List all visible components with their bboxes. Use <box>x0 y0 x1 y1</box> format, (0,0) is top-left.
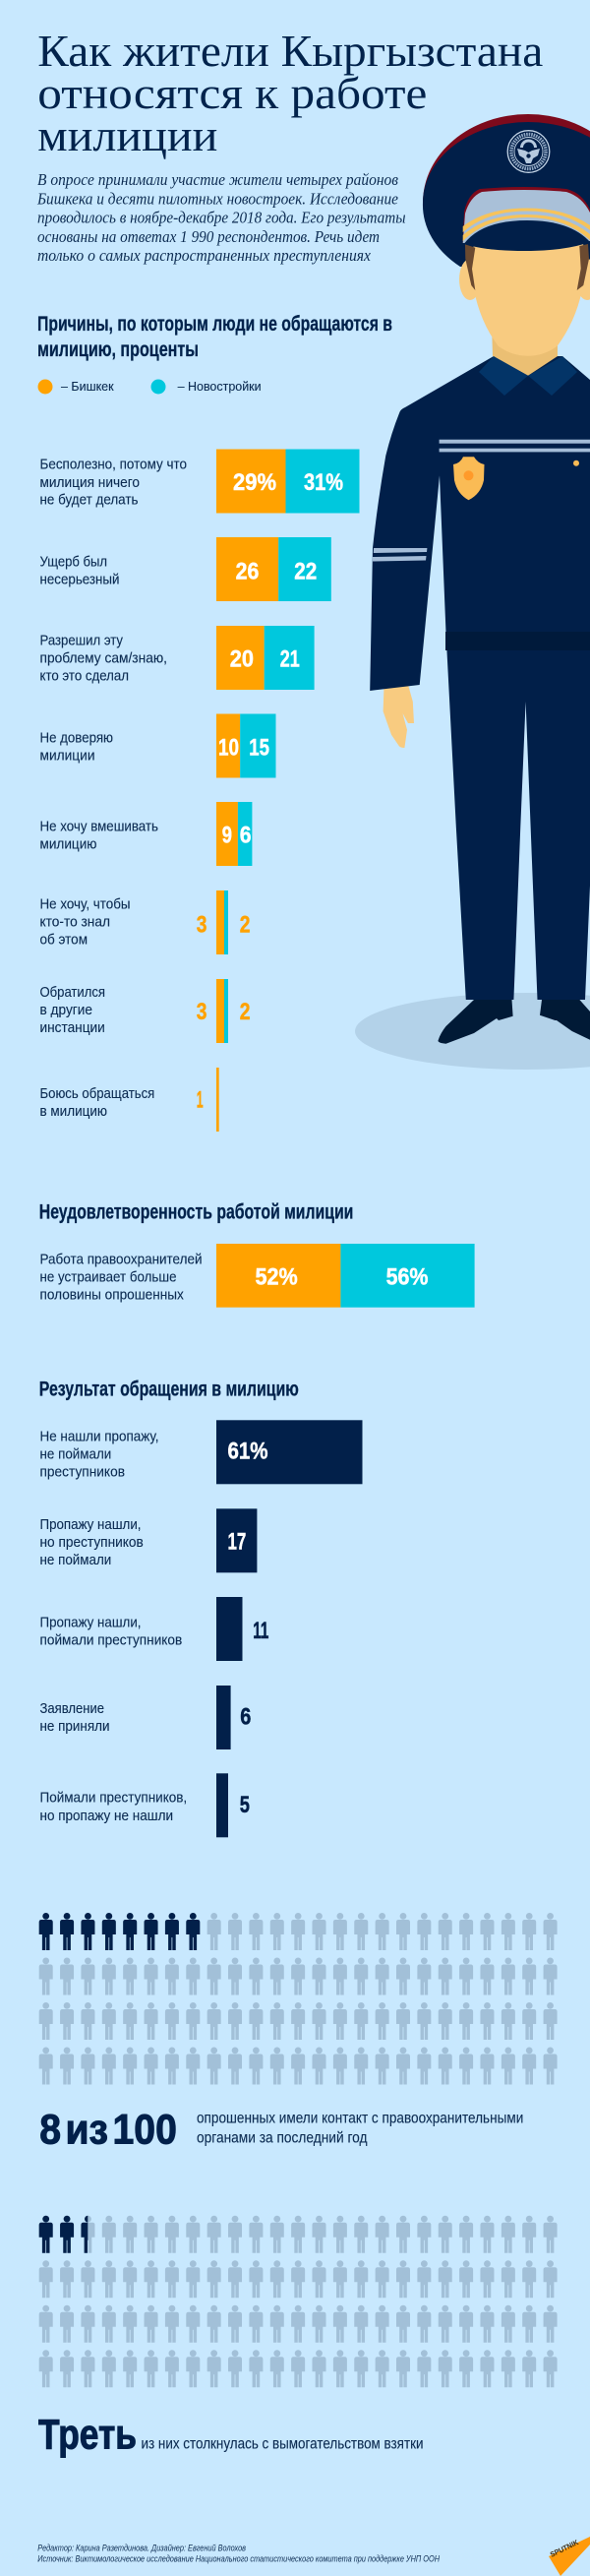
stat: 8 of 100: опрошенных имели контакт с правоохранительными <box>197 2110 523 2126</box>
heading: reasons <box>37 313 392 361</box>
stat: one third <box>38 2411 423 2458</box>
title <box>37 26 543 160</box>
intro text: основаны на ответах 1 990 респондентов. Речь идет <box>37 227 380 246</box>
row: nothing found: Не нашли пропажу, <box>39 1429 159 1444</box>
logo: sputnik: SPUTNIK <box>549 2538 580 2559</box>
row: solved myself: 20 <box>230 646 254 673</box>
bar: dissatisfaction: 52% <box>256 1263 298 1290</box>
ears <box>459 259 590 300</box>
row: afraid <box>39 1068 219 1132</box>
row: not serious: 26 <box>236 558 259 584</box>
row: both: 11 <box>253 1618 268 1644</box>
bar: dissatisfaction <box>39 1244 475 1308</box>
row: other agencies: 2 <box>240 999 250 1025</box>
row: rejected <box>39 1686 251 1749</box>
hair <box>465 244 589 290</box>
row: solved myself: проблему сам/знаю, <box>39 650 167 666</box>
row: other agencies: 3 <box>197 999 206 1025</box>
row: both: Пропажу нашли, <box>39 1615 142 1630</box>
row: other agencies: инстанции <box>39 1020 105 1036</box>
row: item found: Пропажу нашли, <box>39 1517 142 1533</box>
row: nobody should know: 2 <box>240 911 250 938</box>
row: no trust: 15 <box>249 734 269 761</box>
stat: 8 of 100: 8 из 100 <box>39 2106 177 2153</box>
cap visor <box>464 220 590 251</box>
row: useless: 31% <box>304 469 343 496</box>
button <box>573 460 579 466</box>
row: nobody should know <box>39 890 250 954</box>
hand <box>384 685 414 748</box>
bar: dissatisfaction: не устраивает больше <box>39 1270 177 1286</box>
title: милиции <box>37 110 217 160</box>
row: both: поймали преступников <box>39 1632 182 1648</box>
row: item found: не поймали <box>39 1553 111 1568</box>
uniform <box>370 356 590 1000</box>
row: criminals caught: 5 <box>240 1792 250 1818</box>
row: solved myself: Разрешил эту <box>39 633 124 648</box>
logo: sputnik <box>549 2537 590 2576</box>
row: no trust: 10 <box>218 734 239 761</box>
bar: dissatisfaction: половины опрошенных <box>39 1288 184 1304</box>
intro text: Бишкека и десяти пилотных новостроек. Исследование <box>36 189 398 209</box>
hat crown <box>423 114 590 267</box>
belt <box>445 632 590 650</box>
neck <box>492 325 558 376</box>
row: rejected: не приняли <box>39 1719 110 1735</box>
row: useless: не будет делать <box>39 493 138 509</box>
row: nobody should know: об этом <box>39 932 88 948</box>
row: not involve: Не хочу вмешивать <box>39 820 158 835</box>
row: afraid: 1 <box>197 1086 204 1113</box>
collar <box>479 356 577 396</box>
sleeve stripes <box>373 548 427 561</box>
intro text <box>36 170 406 265</box>
row: rejected: Заявление <box>39 1701 104 1717</box>
pictogram: one third <box>39 2216 558 2387</box>
row: afraid: в милицию <box>39 1104 107 1120</box>
chest stripes <box>440 440 590 452</box>
bar chart: reasons <box>39 449 360 1132</box>
row: nothing found: не поймали <box>39 1446 111 1462</box>
row: criminals caught: Поймали преступников, <box>39 1791 187 1807</box>
row: nothing found <box>39 1420 362 1484</box>
legend: – Новостройки <box>178 379 262 394</box>
stat: one third: Треть <box>38 2411 137 2458</box>
heading: reasons: милицию, проценты <box>37 338 199 361</box>
row: not serious: 22 <box>294 558 317 584</box>
row: not involve <box>39 802 252 866</box>
row: not involve: милицию <box>39 837 97 853</box>
row: no trust: милиции <box>39 749 94 765</box>
legend <box>37 379 262 394</box>
row: criminals caught: но пропажу не нашли <box>39 1809 173 1824</box>
row: useless: милиция ничего <box>39 475 140 491</box>
pictogram: 8 of 100 <box>39 1913 558 2084</box>
row: item found <box>39 1508 257 1572</box>
credits: Редактор: Карина Разетдинова. Дизайнер: Евгений Волохов <box>37 2543 246 2553</box>
row: nothing found: 61% <box>228 1439 267 1465</box>
row: item found: но преступников <box>39 1535 144 1551</box>
row: nobody should know: Не хочу, чтобы <box>39 896 130 912</box>
bar: dissatisfaction: 56% <box>386 1263 429 1290</box>
row: nobody should know: кто-то знал <box>39 915 110 931</box>
row: no trust: Не доверяю <box>39 730 113 746</box>
stat: 8 of 100: органами за последний год <box>197 2129 368 2146</box>
row: other agencies: в другие <box>39 1003 92 1018</box>
intro text: только о самых распространенных преступлениях <box>37 246 372 265</box>
credits <box>37 2543 440 2564</box>
illustration: policeman <box>355 114 590 1070</box>
row: not serious: Ущерб был <box>39 554 107 570</box>
heading: result: Результат обращения в милицию <box>39 1378 299 1400</box>
heading: dissatisfaction: Неудовлетворенность работой милиции <box>39 1200 353 1223</box>
row: not serious <box>39 537 331 601</box>
row: afraid: Боюсь обращаться <box>39 1086 154 1102</box>
bar chart: result <box>39 1420 362 1837</box>
figure shadow <box>355 993 590 1070</box>
row: both <box>39 1597 268 1661</box>
row: item found: 17 <box>228 1529 246 1556</box>
legend: – Бишкек <box>61 379 114 394</box>
heading: reasons: Причины, по которым люди не обращаются в <box>37 313 392 336</box>
row: useless: 29% <box>233 469 276 496</box>
row: solved myself: кто это сделал <box>39 668 129 684</box>
row: nothing found: преступников <box>39 1464 125 1480</box>
row: criminals caught <box>39 1773 250 1837</box>
row: other agencies: Обратился <box>39 985 105 1001</box>
row: nobody should know: 3 <box>197 911 206 938</box>
row: useless <box>39 449 360 514</box>
shoes <box>439 1000 590 1044</box>
row: no trust <box>39 714 275 777</box>
face <box>473 241 583 356</box>
intro text: В опросе принимали участие жители четырех районов <box>37 170 398 189</box>
stat: 8 of 100 <box>39 2106 523 2153</box>
row: rejected: 6 <box>240 1704 251 1731</box>
stat: one third: из них столкнулась с вымогательством взятки <box>142 2435 423 2452</box>
title: Как жители Кыргызстана <box>37 26 543 76</box>
row: not serious: несерьезный <box>39 572 120 587</box>
intro text: проводилось в ноябре-декабре 2018 года. Его результаты <box>37 209 405 226</box>
row: other agencies <box>39 979 250 1043</box>
row: not involve: 9 <box>222 823 232 849</box>
credits: Источник: Виктимологическое исследование Национального статистического комитета при поддержке УНП ООН <box>37 2553 440 2564</box>
hat seal <box>507 131 550 172</box>
row: useless: Бесполезно, потому что <box>39 458 187 473</box>
row: solved myself <box>39 626 315 690</box>
bar: dissatisfaction: Работа правоохранителей <box>39 1253 203 1268</box>
row: solved myself: 21 <box>280 646 300 673</box>
badge <box>453 457 484 500</box>
row: not involve: 6 <box>240 823 252 849</box>
cap band <box>463 187 590 243</box>
title: относятся к работе <box>37 68 427 118</box>
